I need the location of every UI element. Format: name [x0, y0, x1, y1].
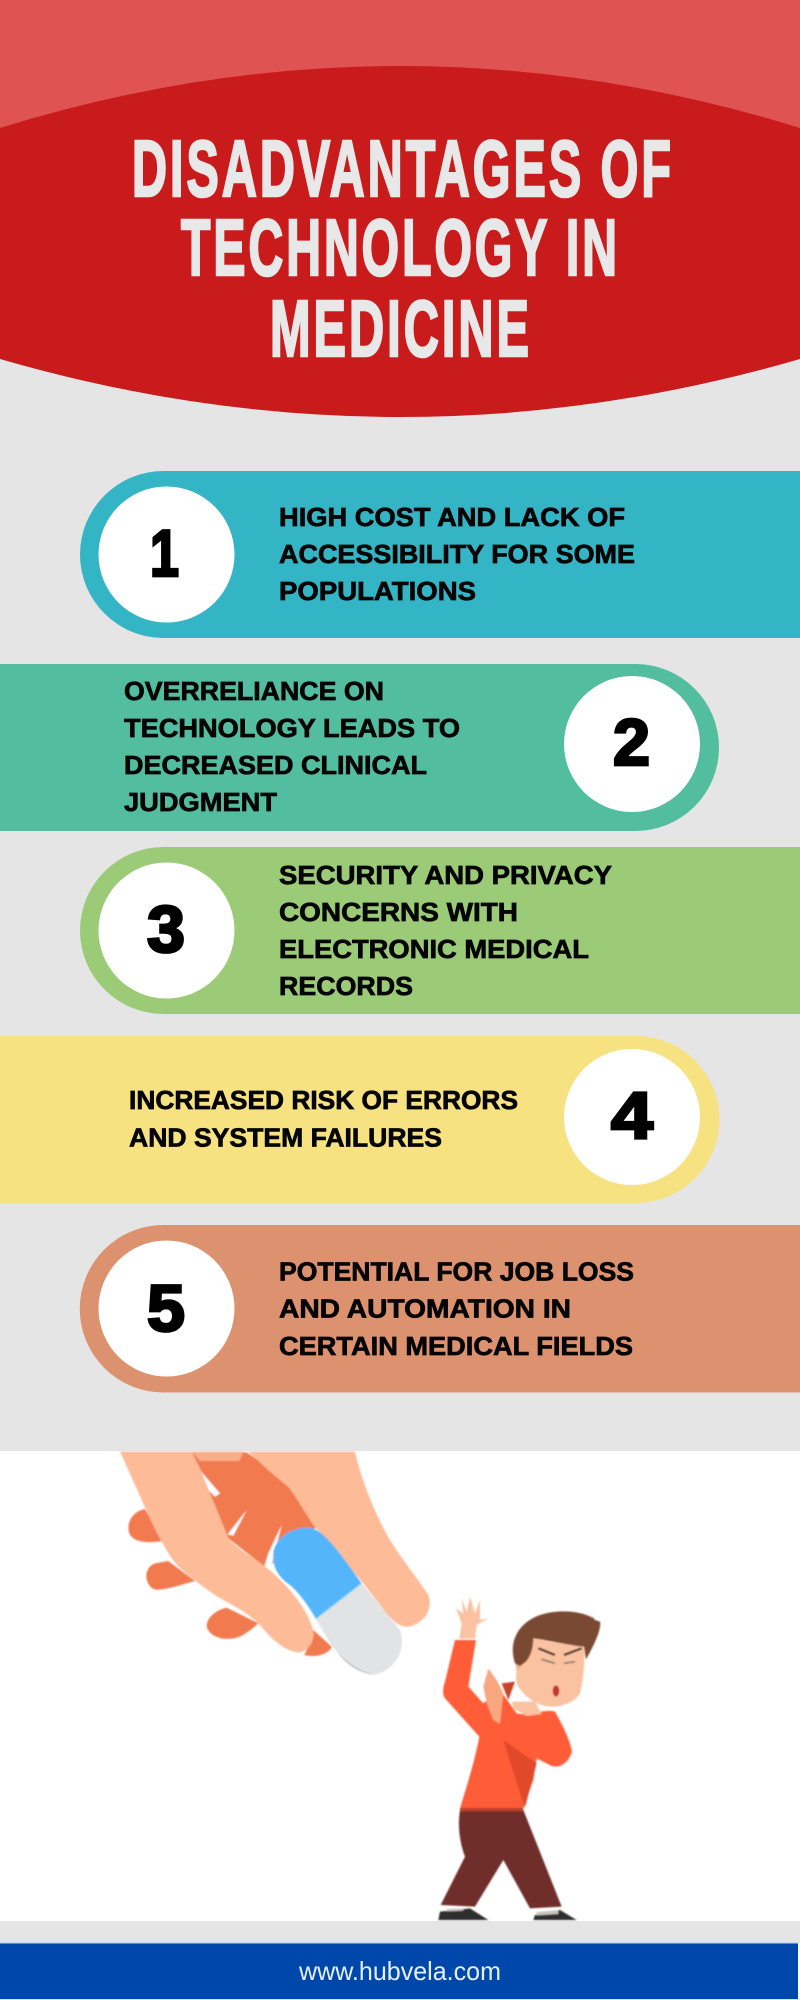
text: item 5: CERTAIN MEDICAL FIELDS — [279, 1333, 633, 1361]
text: item 3: ELECTRONIC MEDICAL — [279, 936, 589, 964]
footer url: www.hubvela.com — [298, 1956, 501, 1986]
text: item 4 — [129, 1087, 518, 1152]
text: item 1: ACCESSIBILITY FOR SOME — [279, 541, 635, 569]
illustration panel — [0, 1451, 800, 1921]
icon: frightened person — [438, 1597, 600, 1920]
text: item 5 — [279, 1258, 634, 1361]
panel: item 4 — [0, 1036, 720, 1203]
number badge 5 — [98, 1240, 234, 1376]
number badge 4 — [564, 1049, 700, 1185]
title: MEDICINE — [270, 284, 532, 373]
text: item 3 — [279, 862, 612, 1001]
text: item 4: INCREASED RISK OF ERRORS — [129, 1087, 518, 1115]
text: item 2: JUDGMENT — [124, 789, 277, 817]
panel: item 1 — [80, 471, 800, 638]
panel: item 3 — [80, 847, 800, 1014]
text: item 3: CONCERNS WITH — [279, 899, 518, 927]
number badge 2 — [564, 676, 700, 812]
text: item 5: POTENTIAL FOR JOB LOSS — [279, 1258, 634, 1286]
number badge 3: 3 — [147, 892, 185, 966]
number badge 4: 4 — [611, 1078, 653, 1152]
text: item 3: SECURITY AND PRIVACY — [279, 862, 612, 890]
number badge 1 — [98, 486, 234, 622]
text: item 2: TECHNOLOGY LEADS TO — [124, 715, 460, 743]
text: item 2: OVERRELIANCE ON — [124, 678, 384, 706]
panel: item 5 — [80, 1225, 800, 1392]
number badge 1: 1 — [150, 516, 179, 590]
number badge 5: 5 — [147, 1271, 185, 1345]
text: item 2: DECREASED CLINICAL — [124, 752, 427, 780]
footer bar — [0, 1942, 798, 1999]
text: item 1: HIGH COST AND LACK OF — [279, 504, 625, 532]
text: item 2 — [124, 678, 460, 817]
icon: hand holding capsule — [120, 1452, 430, 1674]
panel: item 2 — [0, 664, 719, 831]
number badge 2: 2 — [613, 705, 650, 779]
text: item 4: AND SYSTEM FAILURES — [129, 1124, 442, 1152]
text: item 1: POPULATIONS — [279, 578, 476, 606]
text: item 5: AND AUTOMATION IN — [279, 1296, 571, 1324]
title — [132, 124, 674, 373]
text: item 1 — [279, 504, 635, 606]
number badge 3 — [98, 862, 234, 998]
header banner — [0, 0, 800, 417]
text: item 3: RECORDS — [279, 973, 413, 1001]
